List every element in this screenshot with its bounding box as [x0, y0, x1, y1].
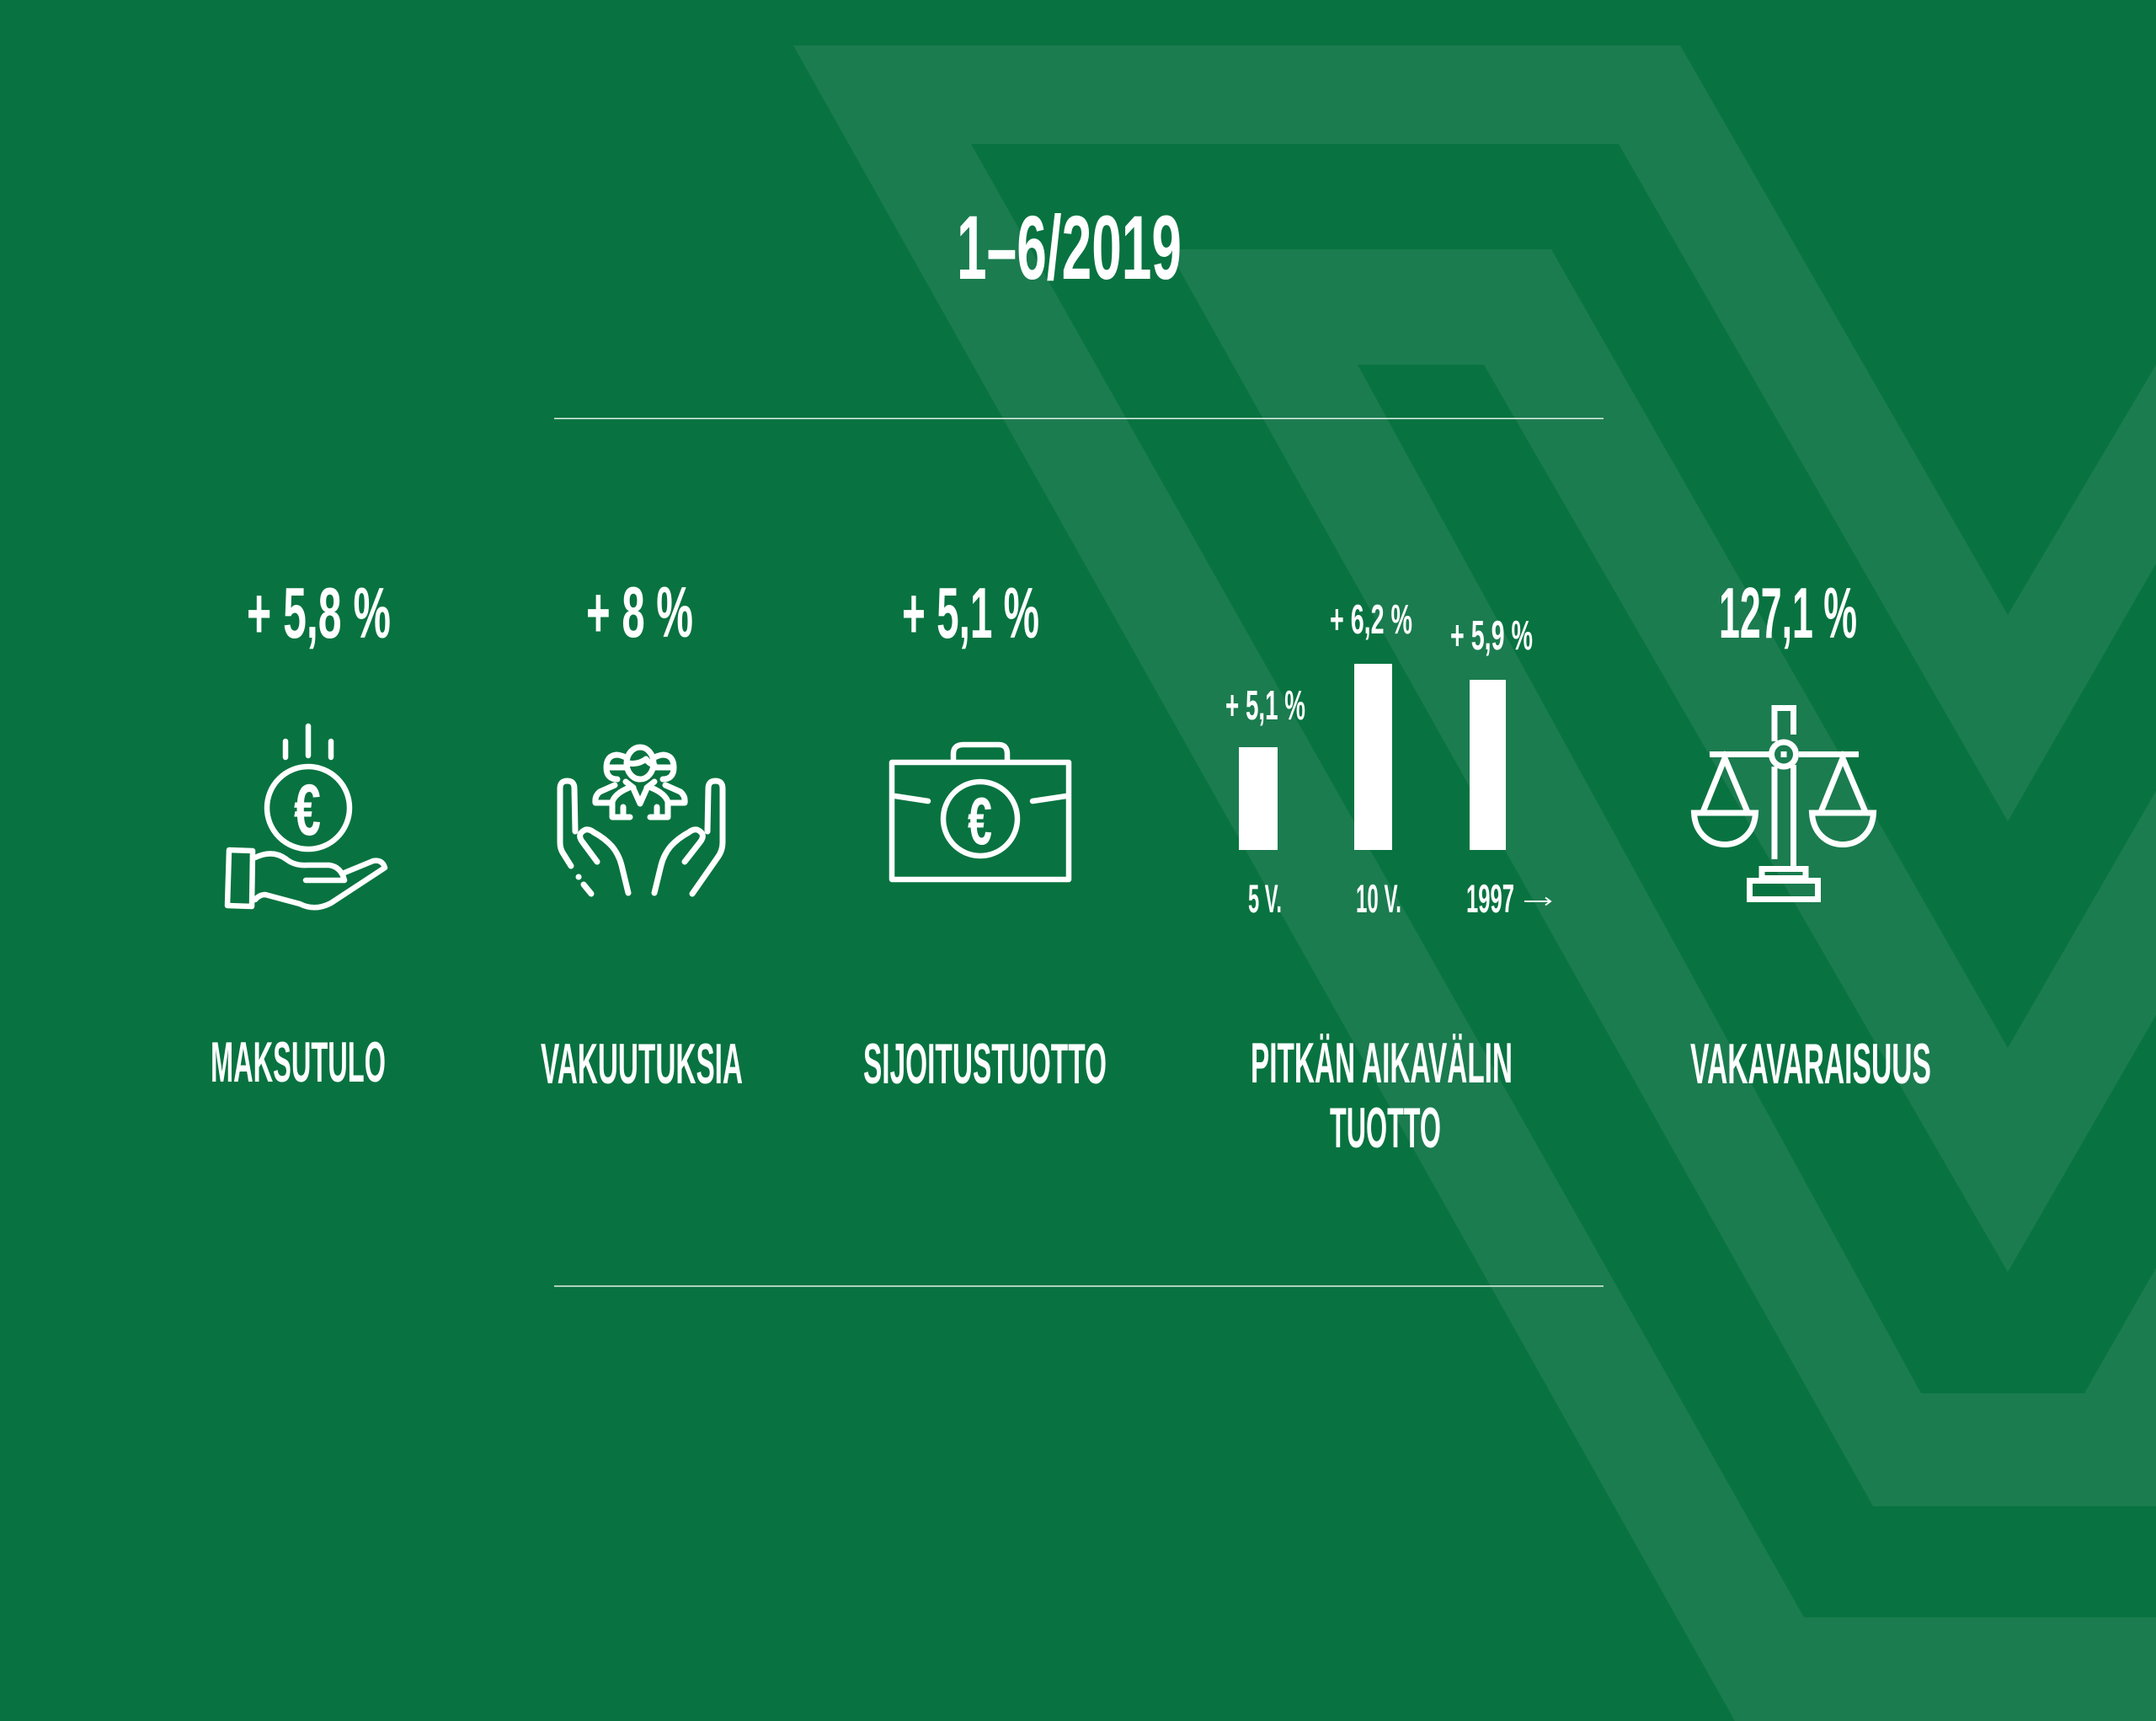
panel: pitkän aikavälin tuotto: PITKÄN AIKAVÄLIN	[1251, 1031, 1513, 1095]
icon: hand holding euro coin: €	[294, 770, 321, 851]
label: TUOTTO	[1330, 1096, 1441, 1160]
value: +5,8 %: + 5,8 %	[247, 574, 391, 654]
icon: briefcase with euro coin	[892, 745, 1069, 879]
bar: 10 v.	[1330, 597, 1412, 921]
infographic canvas: VAKUUTUKSIA	[541, 1032, 743, 1096]
bar: 10 v.: + 6,2 %	[1330, 597, 1412, 643]
icon: hand holding euro coin	[227, 726, 385, 907]
panel: vakavaraisuus	[1690, 574, 1931, 1096]
bar: 5 v.: 5 V.	[1248, 876, 1282, 921]
panel: sijoitustuotto	[863, 574, 1107, 1096]
bar: 5 v.: + 5,1 %	[1225, 683, 1305, 729]
icon: scales	[1694, 708, 1873, 900]
bar chart	[1225, 597, 1550, 921]
panel: pitkän aikavälin tuotto	[1225, 597, 1550, 1160]
value: 127,1 %: 127,1 %	[1719, 574, 1857, 654]
title: 1–6/2019	[957, 196, 1182, 298]
bar: 1997 onwards: 1997	[1466, 876, 1514, 921]
label	[1251, 1031, 1513, 1160]
bar: 10 v.: 10 V.	[1356, 876, 1401, 921]
infographic canvas: MAKSUTULO	[211, 1030, 386, 1094]
arrow	[1524, 898, 1550, 905]
panel: vakuutuksia	[541, 573, 743, 1096]
value: +8 %: + 8 %	[586, 573, 693, 653]
infographic canvas: SIJOITUSTUOTTO	[863, 1032, 1107, 1096]
bar: 1997 onwards: + 5,9 %	[1450, 613, 1533, 659]
bar: 1997 onwards	[1450, 613, 1550, 921]
icon: hands holding people	[560, 747, 723, 894]
background chevron pattern	[793, 45, 2156, 1721]
panel: maksutulo	[211, 574, 391, 1094]
icon: briefcase with euro coin: €	[968, 783, 992, 858]
value: +5,1 %: + 5,1 %	[902, 574, 1039, 654]
bar: 5 v.	[1225, 683, 1305, 921]
